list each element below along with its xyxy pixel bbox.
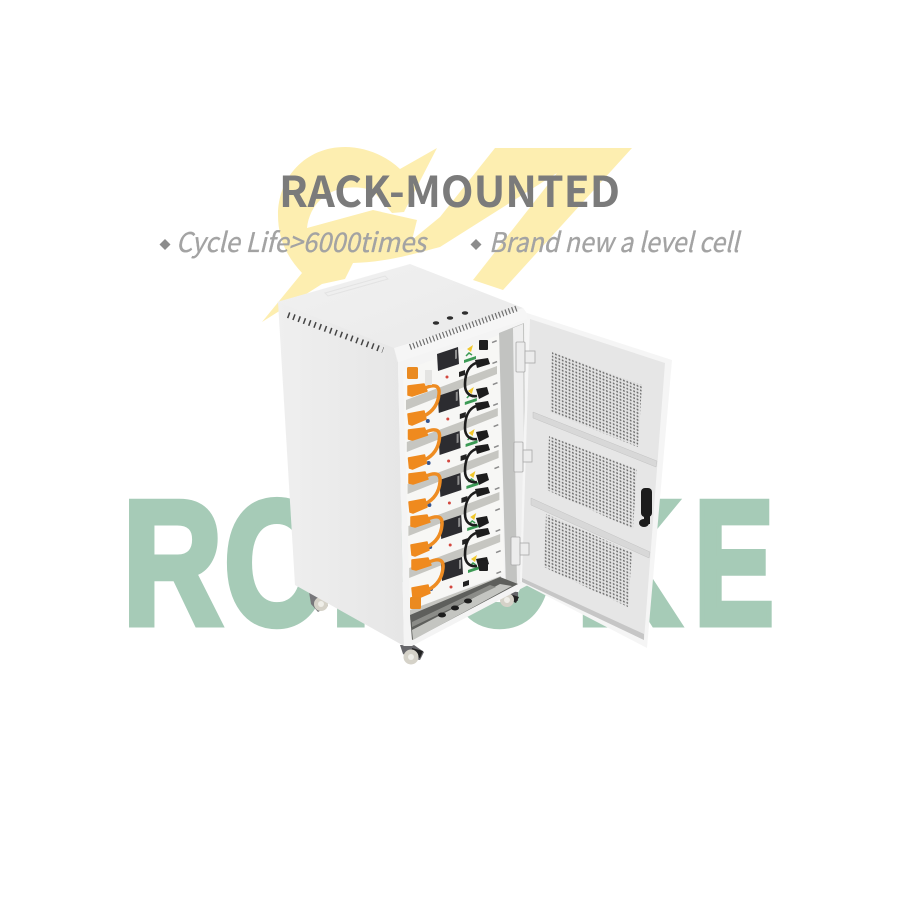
- caster: rear left: [309, 592, 328, 612]
- top black terminal: [479, 340, 488, 350]
- front vent slots: [410, 308, 518, 347]
- background wordmark: O: [224, 464, 330, 662]
- right frame post: [499, 323, 526, 590]
- bullet one: Cycle Life>6000times: [176, 221, 428, 260]
- caster: rear right: [498, 590, 519, 607]
- switch block: [425, 370, 432, 385]
- bullet two: Brand new a level cell: [489, 221, 742, 260]
- top recess outline: [325, 276, 388, 296]
- cabinet top panel: [277, 264, 530, 362]
- black power cables: [465, 358, 490, 569]
- tray holes: [438, 598, 472, 618]
- title: RACK-MOUNTED: [279, 159, 620, 220]
- background wordmark: E: [694, 464, 774, 662]
- bottom black terminal: [479, 561, 488, 571]
- top cable holes: [433, 311, 468, 325]
- battery cabinet: [277, 264, 672, 664]
- bottom orange terminal: [410, 597, 421, 609]
- base tray: [410, 577, 518, 640]
- caster: front: [400, 645, 424, 664]
- door lower lip: [522, 578, 644, 640]
- perforated panel upper: [550, 352, 642, 447]
- open door: [520, 313, 672, 648]
- front frame: [398, 318, 530, 646]
- background wordmark: P: [330, 464, 430, 662]
- hinge middle: [514, 442, 532, 472]
- yellow logo mark: [262, 147, 632, 322]
- battery modules: [406, 340, 501, 620]
- door handle: [639, 488, 652, 527]
- module backplane: [403, 335, 504, 610]
- perforated panel lower: [544, 514, 632, 607]
- background wordmark: O: [446, 464, 554, 662]
- background wordmark: [122, 464, 774, 662]
- top orange terminal: [407, 367, 418, 379]
- door inner panel: [522, 319, 665, 640]
- perforated panel middle: [547, 436, 637, 529]
- door rail lower: [531, 498, 650, 558]
- hinge lower: [511, 537, 529, 565]
- hinge upper: [516, 342, 535, 372]
- orange power cables: [408, 384, 443, 599]
- side vent slots: [288, 315, 383, 350]
- door outer frame: [520, 313, 672, 648]
- background wordmark: R: [122, 464, 222, 662]
- background wordmark: K: [576, 464, 680, 662]
- front header band: [394, 308, 530, 362]
- door rail upper: [533, 412, 657, 467]
- cabinet side panel: [278, 302, 404, 646]
